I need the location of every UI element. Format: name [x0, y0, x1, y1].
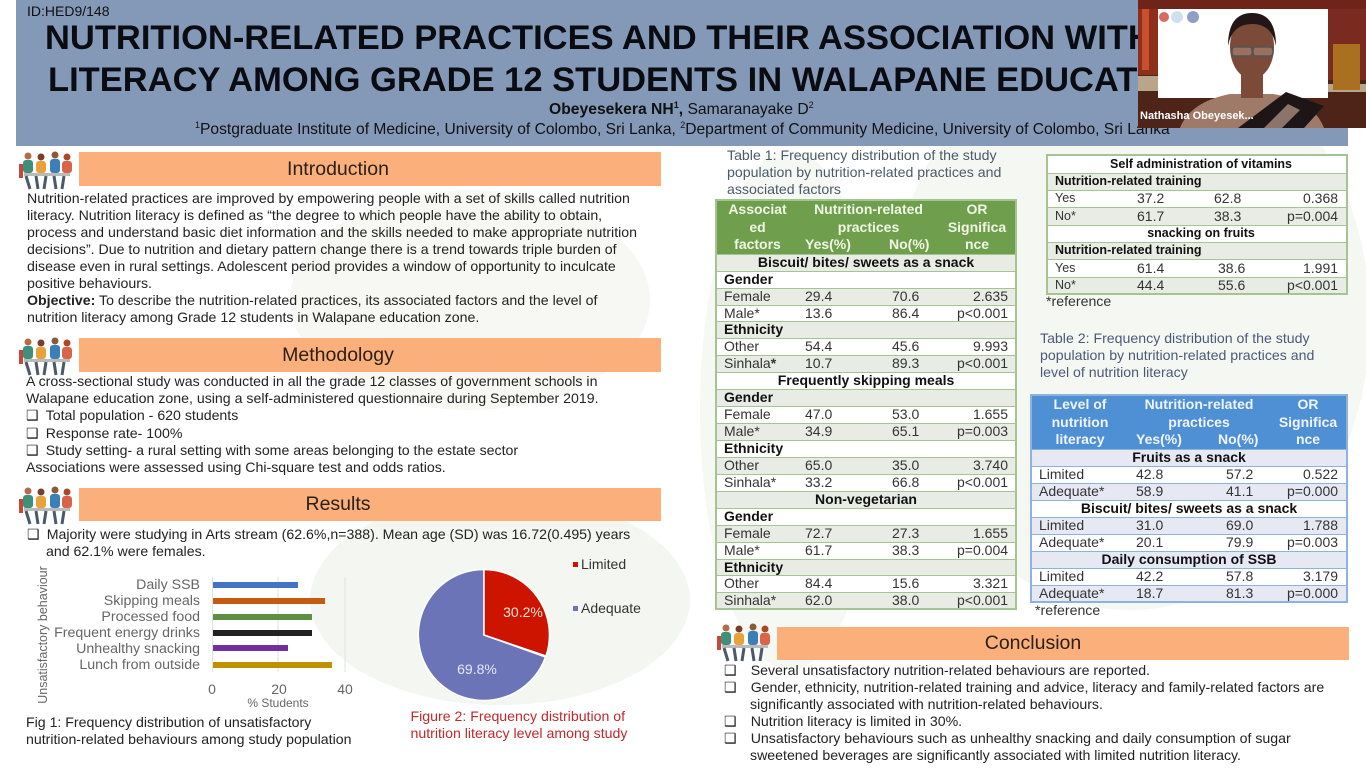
- table 1: 45.6: [892, 338, 919, 354]
- table 1: 72.7: [805, 525, 832, 541]
- table 2: Biscuit/ bites/ sweets as a snack: [1081, 500, 1297, 516]
- text: methodology: [26, 373, 599, 475]
- footnote: table 2: *reference: [1035, 602, 1100, 618]
- title: LITERACY AMONG GRADE 12 STUDENTS IN WALAPANE EDUCATION: [48, 61, 1199, 99]
- text: methodology: ❑ Response rate- 100%: [26, 425, 182, 441]
- bar chart: unsatisfactory behaviours: 40: [337, 681, 353, 697]
- table 1 continued: 61.7: [1137, 208, 1164, 224]
- icon: students Introduction: [19, 152, 72, 190]
- text: methodology: ❑ Study setting- a rural setting with some areas belonging to the estate sector: [26, 442, 518, 458]
- table 2: 0.522: [1303, 466, 1338, 482]
- caption: figure 2: [410, 708, 628, 741]
- text: introduction: process and understand basic diet information and the skills needed to make appropriate nutrition: [27, 224, 637, 240]
- table 1: Sinhala*: [724, 474, 776, 490]
- table 1: p<0.001: [957, 474, 1008, 490]
- pie chart: nutrition literacy: [418, 556, 641, 701]
- table 1: p=0.003: [957, 423, 1008, 439]
- table 1: Sinhala*: [724, 355, 776, 371]
- table 2: 1.788: [1303, 517, 1338, 533]
- caption: table 1: population by nutrition-related practices and: [727, 164, 1001, 180]
- text: conclusion: ❑ Unsatisfactory behaviours such as unhealthy snacking and daily consumption of sugar: [724, 730, 1291, 746]
- table 2: Nutrition-related: [1145, 396, 1253, 412]
- text: introduction: disease even in rural settings. Adolescent period provides a window of opportunity to inculcate: [27, 258, 616, 274]
- table 1 continued: No*: [1055, 208, 1076, 222]
- table 2: p=0.003: [1287, 534, 1338, 550]
- title: [45, 19, 1199, 99]
- heading: Methodology: Methodology: [282, 344, 394, 366]
- table 1: Nutrition-related: [814, 201, 923, 217]
- table 2: Fruits as a snack: [1132, 449, 1246, 465]
- heading: Results: Results: [305, 493, 371, 515]
- table 2: 18.7: [1136, 585, 1163, 601]
- table 1: 65.0: [805, 457, 832, 473]
- table 1: ed: [749, 218, 766, 234]
- table 2: 57.2: [1226, 466, 1253, 482]
- table 1 continued: Yes: [1055, 191, 1075, 205]
- text: conclusion: sweetened beverages are significantly associated with limited nutrition literacy.: [750, 747, 1241, 763]
- table 2: p=0.000: [1287, 483, 1338, 499]
- table 2: Adequate*: [1039, 534, 1104, 550]
- text: results: ❑ Majority were studying in Arts stream (62.6%,n=388). Mean age (SD) was 16.72(0.495) years: [27, 526, 630, 542]
- table 1: 1.655: [973, 525, 1008, 541]
- footnote: table 1: *reference: [1046, 293, 1111, 309]
- text: introduction: Objective: To describe the nutrition-related practices, its associated factors and the level of: [27, 292, 597, 308]
- table 1: [715, 199, 1017, 610]
- bar chart: unsatisfactory behaviours: Unsatisfactory behaviour: [36, 566, 50, 704]
- table 2: literacy: [1055, 431, 1105, 447]
- table 1: 38.3: [892, 542, 919, 558]
- table 1 continued: [1046, 154, 1348, 295]
- table 2: 31.0: [1136, 517, 1163, 533]
- caption: figure 1: [26, 714, 351, 747]
- table 1: Gender: [724, 508, 773, 524]
- icon: students Conclusion: [717, 624, 770, 662]
- table 2: 57.8: [1226, 568, 1253, 584]
- table 1: nce: [965, 236, 989, 252]
- table 1: 35.0: [892, 457, 919, 473]
- table 1: Yes(%): [805, 236, 851, 252]
- table 1 continued: 38.6: [1218, 260, 1245, 276]
- text: methodology: A cross-sectional study was conducted in all the grade 12 classes of government schools in: [26, 373, 597, 389]
- table 1: 9.993: [973, 338, 1008, 354]
- table 1: Sinhala*: [724, 592, 776, 608]
- heading: Introduction: [79, 152, 661, 186]
- table 1: Frequently skipping meals: [778, 372, 954, 388]
- poster ID: ID:HED9/148: [27, 3, 109, 19]
- table 1: p<0.001: [957, 355, 1008, 371]
- bar chart: unsatisfactory behaviours: Frequent energy drinks: [54, 625, 200, 641]
- bar chart: unsatisfactory behaviours: 20: [271, 681, 287, 697]
- text: methodology: ❑ Total population - 620 students: [26, 407, 238, 423]
- table 1 continued: Yes: [1055, 260, 1075, 274]
- caption: figure 1: Fig 1: Frequency distribution of unsatisfactory: [26, 714, 311, 730]
- table 1: Other: [724, 457, 759, 473]
- table 2: 3.179: [1303, 568, 1338, 584]
- heading: Conclusion: [777, 627, 1349, 660]
- table 1 continued: 37.2: [1137, 190, 1164, 206]
- table 1: 27.3: [892, 525, 919, 541]
- table 1: 65.1: [892, 423, 919, 439]
- text: introduction: literacy. Nutrition literacy is defined as “the degree to which people have the ability to obtain,: [27, 207, 602, 223]
- table 1: p<0.001: [957, 592, 1008, 608]
- speaker webcam: [1138, 0, 1366, 128]
- table 1: practices: [838, 218, 899, 234]
- caption: table 2: population by nutrition-related practices and: [1040, 347, 1314, 363]
- bar chart: unsatisfactory behaviours: 0: [208, 681, 216, 697]
- table 1: 15.6: [892, 575, 919, 591]
- table 1: factors: [734, 236, 781, 252]
- text: conclusion: [724, 662, 1324, 763]
- table 1: 84.4: [805, 575, 832, 591]
- caption: table 1: associated factors: [727, 181, 841, 197]
- table 1 continued: Nutrition-related training: [1055, 174, 1202, 188]
- table 1: Ethnicity: [724, 321, 783, 337]
- text: introduction: [27, 190, 637, 325]
- table 2: 69.0: [1226, 517, 1253, 533]
- table 1: 29.4: [805, 288, 832, 304]
- caption: figure 2: nutrition literacy level among study: [410, 725, 627, 741]
- table 1: 47.0: [805, 406, 832, 422]
- caption: figure 1: nutrition-related behaviours among study population: [26, 731, 351, 747]
- table 2: nutrition: [1052, 414, 1108, 430]
- table 2: Limited: [1039, 568, 1084, 584]
- table 1: Biscuit/ bites/ sweets as a snack: [758, 254, 974, 270]
- table 1: 3.740: [973, 457, 1008, 473]
- table 1: Other: [724, 338, 759, 354]
- table 2: No(%): [1218, 431, 1258, 447]
- caption: table 1: [727, 147, 1001, 197]
- icon: students Methodology: [19, 338, 72, 376]
- table 1 continued: p<0.001: [1287, 277, 1338, 293]
- table 1: 34.9: [805, 423, 832, 439]
- table 1: Significa: [948, 218, 1006, 234]
- table 1 continued: Nutrition-related training: [1055, 243, 1202, 257]
- table 1 continued: snacking on fruits: [1147, 226, 1255, 240]
- table 1: OR: [967, 201, 988, 217]
- table 1: 61.7: [805, 542, 832, 558]
- text: introduction: positive behaviours.: [27, 275, 152, 291]
- pie chart: nutrition literacy: 69.8%: [457, 661, 497, 677]
- table 1 continued: No*: [1055, 278, 1076, 292]
- table 2: Limited: [1039, 517, 1084, 533]
- table 2: Daily consumption of SSB: [1102, 551, 1277, 567]
- table 2: 41.1: [1226, 483, 1253, 499]
- table 1: 2.635: [973, 288, 1008, 304]
- text: introduction: nutrition literacy among Grade 12 students in Walapane education zone.: [27, 309, 479, 325]
- bar chart: unsatisfactory behaviours: Processed food: [101, 609, 200, 625]
- bar chart: unsatisfactory behaviours: Skipping meals: [104, 593, 200, 609]
- table 1: Ethnicity: [724, 440, 783, 456]
- table 2: Limited: [1039, 466, 1084, 482]
- text: introduction: decisions”. Due to nutrition and dietary pattern change there is a trend towards triple burden of: [27, 241, 617, 257]
- table 1: 70.6: [892, 288, 919, 304]
- text: methodology: Associations were assessed using Chi-square test and odds ratios.: [26, 459, 446, 475]
- heading: Conclusion: Conclusion: [985, 632, 1081, 654]
- table 2: Significa: [1279, 414, 1337, 430]
- table 1: Gender: [724, 271, 773, 287]
- table 1 continued: 55.6: [1218, 277, 1245, 293]
- table 1 continued: 44.4: [1137, 277, 1164, 293]
- title: NUTRITION-RELATED PRACTICES AND THEIR ASSOCIATION WITH: [45, 19, 1153, 57]
- bar chart: unsatisfactory behaviours: Lunch from outside: [79, 657, 200, 673]
- header banner: [16, 0, 1348, 146]
- caption: table 2: [1040, 330, 1314, 380]
- table 1: Female: [724, 288, 771, 304]
- table 1: Female: [724, 525, 771, 541]
- table 2: 58.9: [1136, 483, 1163, 499]
- table 1: Male*: [724, 423, 760, 439]
- bar chart: unsatisfactory behaviours: Daily SSB: [136, 577, 200, 593]
- table 1: 3.321: [973, 575, 1008, 591]
- table 2: OR: [1298, 396, 1319, 412]
- table 1: 53.0: [892, 406, 919, 422]
- bar chart: unsatisfactory behaviours: % Students: [247, 696, 309, 710]
- bar chart: unsatisfactory behaviours: [36, 566, 353, 710]
- caption: table 1: Table 1: Frequency distribution of the study: [727, 147, 997, 163]
- table 1: 89.3: [892, 355, 919, 371]
- table 2: Adequate*: [1039, 483, 1104, 499]
- pie chart: nutrition literacy: Adequate: [581, 600, 641, 616]
- table 2: p=0.000: [1287, 585, 1338, 601]
- icon: students Results: [19, 486, 72, 524]
- table 2: [1030, 394, 1348, 603]
- table 1: 1.655: [973, 406, 1008, 422]
- bar chart: unsatisfactory behaviours: Unhealthy snacking: [76, 641, 200, 657]
- pie chart: nutrition literacy: Limited: [581, 556, 626, 572]
- table 1: Gender: [724, 389, 773, 405]
- affiliations: 1Postgraduate Institute of Medicine, University of Colombo, Sri Lanka, 2Department of Community Medicine, University of Colombo, Sri Lanka: [195, 120, 1170, 138]
- table 1 continued: p=0.004: [1287, 208, 1338, 224]
- speaker name: Nathasha Obeyesek...: [1140, 110, 1254, 122]
- table 1 continued: 61.4: [1137, 260, 1164, 276]
- text: results: and 62.1% were females.: [46, 543, 206, 559]
- authors: Obeyesekera NH1, Samaranayake D2: [549, 100, 814, 118]
- table 1: Female: [724, 406, 771, 422]
- text: conclusion: ❑ Nutrition literacy is limited in 30%.: [724, 713, 962, 729]
- table 1: Other: [724, 575, 759, 591]
- text: conclusion: significantly associated with nutrition-related behaviours.: [750, 696, 1103, 712]
- text: results: [27, 526, 630, 559]
- heading: Introduction: Introduction: [287, 158, 389, 180]
- caption: table 2: Table 2: Frequency distribution of the study: [1040, 330, 1310, 346]
- table 1: 33.2: [805, 474, 832, 490]
- table 2: Adequate*: [1039, 585, 1104, 601]
- heading: Results: [79, 488, 661, 521]
- table 2: practices: [1168, 414, 1230, 430]
- table 2: 81.3: [1226, 585, 1253, 601]
- table 2: 42.2: [1136, 568, 1163, 584]
- table 1: 54.4: [805, 338, 832, 354]
- table 1 continued: 0.368: [1303, 190, 1338, 206]
- text: conclusion: ❑ Several unsatisfactory nutrition-related behaviours are reported.: [724, 662, 1150, 678]
- table 1 continued: Self administration of vitamins: [1110, 157, 1292, 171]
- table 1 continued: 38.3: [1214, 208, 1241, 224]
- table 1: Male*: [724, 542, 760, 558]
- caption: figure 2: Figure 2: Frequency distribution of: [410, 708, 625, 724]
- table 2: Level of: [1054, 396, 1106, 412]
- table 2: 20.1: [1136, 534, 1163, 550]
- table 1: Associat: [728, 201, 787, 217]
- table 2: 42.8: [1136, 466, 1163, 482]
- text: methodology: Walapane education zone, using a self-administered questionnaire during September 2019.: [26, 390, 599, 406]
- text: introduction: Nutrition-related practices are improved by empowering people with a set of skills called nutrition: [27, 190, 630, 206]
- table 1: 66.8: [892, 474, 919, 490]
- table 1 continued: 1.991: [1303, 260, 1338, 276]
- table 1: 38.0: [892, 592, 919, 608]
- pie chart: nutrition literacy: 30.2%: [503, 604, 543, 620]
- table 2: nce: [1296, 431, 1320, 447]
- caption: table 2: level of nutrition literacy: [1040, 364, 1188, 380]
- table 2: Yes(%): [1136, 431, 1182, 447]
- table 1: Non-vegetarian: [815, 491, 917, 507]
- table 1: No(%): [889, 236, 929, 252]
- table 1: 62.0: [805, 592, 832, 608]
- heading: Methodology: [79, 338, 661, 372]
- table 1: 10.7: [805, 355, 832, 371]
- text: conclusion: ❑ Gender, ethnicity, nutrition-related training and advice, literacy and family-related factors are: [724, 679, 1324, 695]
- table 1 continued: 62.8: [1214, 190, 1241, 206]
- table 1: p=0.004: [957, 542, 1008, 558]
- table 2: 79.9: [1226, 534, 1253, 550]
